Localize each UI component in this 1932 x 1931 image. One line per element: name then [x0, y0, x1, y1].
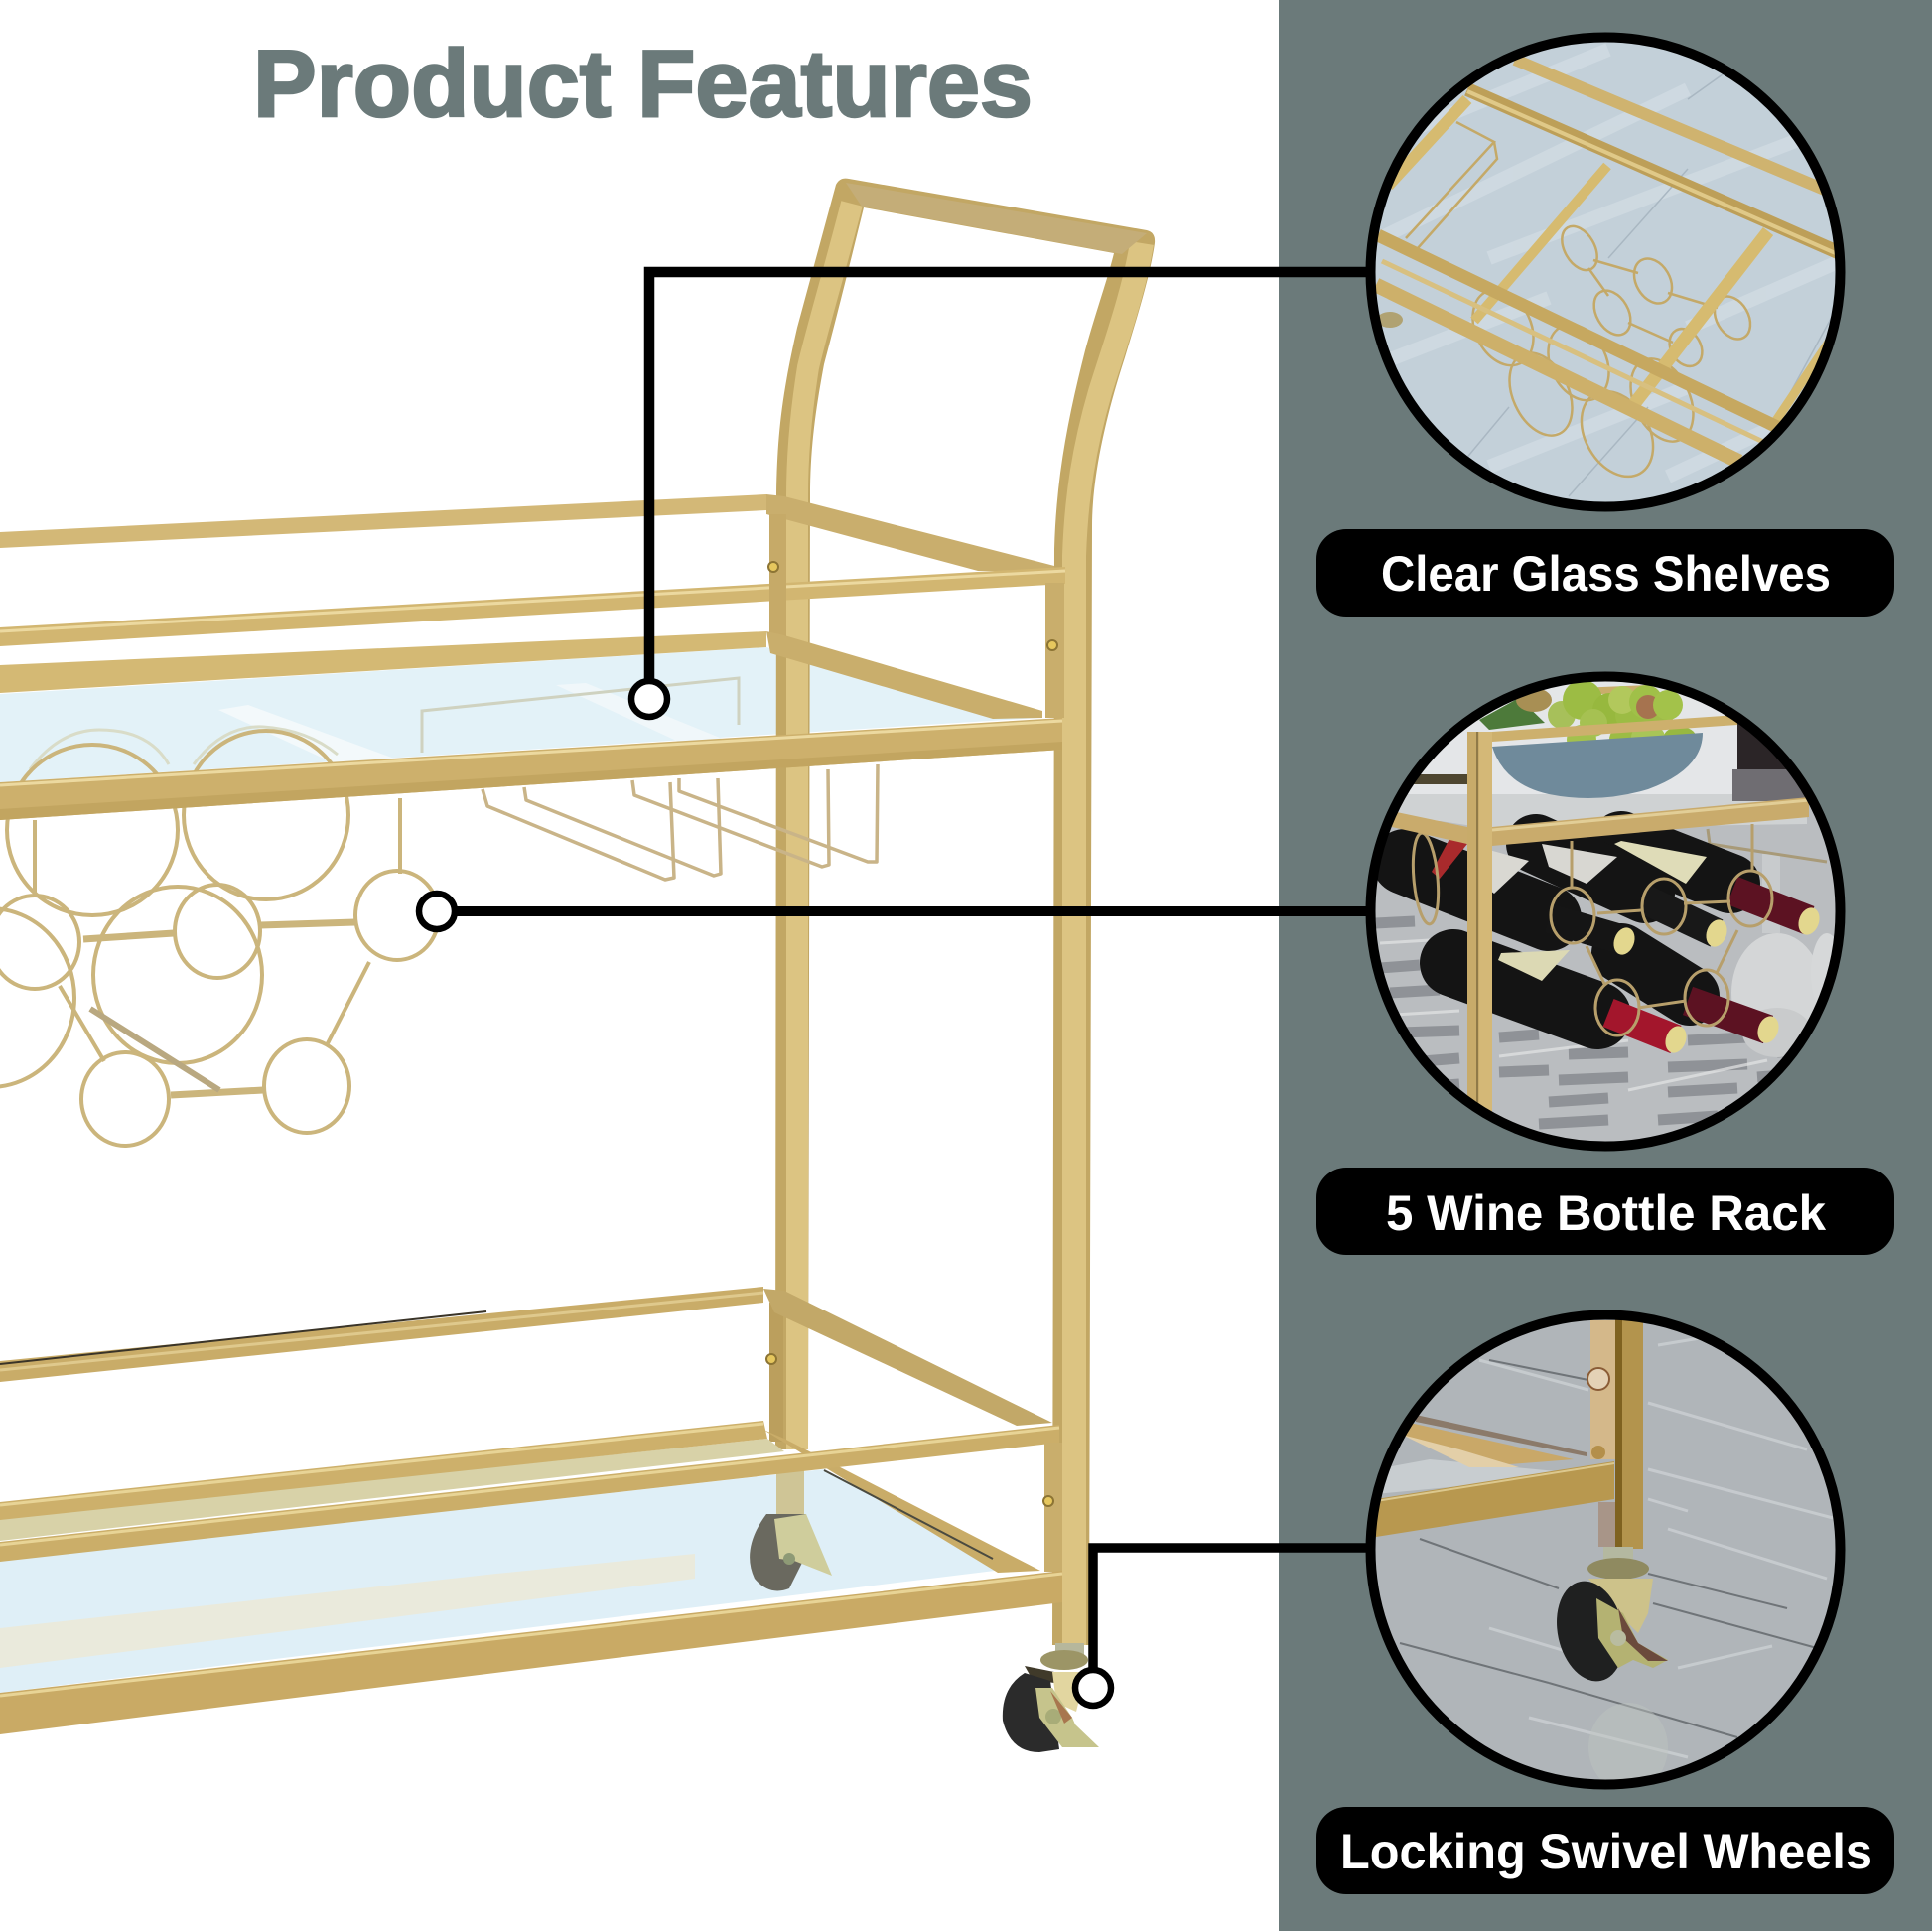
lower right bracket with bolt — [1043, 1443, 1062, 1572]
fruit bowl — [1492, 733, 1703, 798]
upper front rail — [0, 567, 1065, 646]
carpet — [1376, 806, 1835, 1142]
upper shelf back rail — [0, 494, 766, 548]
floor reflection — [1618, 1704, 1656, 1716]
leader line: swivel wheels — [1075, 1548, 1375, 1706]
rear bracket with bolts — [766, 514, 786, 1442]
label pill: clear glass shelves: Clear Glass Shelves — [1381, 546, 1831, 602]
gold top bar — [1492, 715, 1737, 742]
right bracket with bolt — [1045, 583, 1064, 718]
panel: features background — [1279, 0, 1932, 1931]
lower side rails — [763, 1289, 1052, 1573]
upper shelf glass and background — [1408, 681, 1809, 821]
gold post — [1467, 732, 1479, 1114]
wine glasses — [1731, 854, 1843, 1057]
glass hanger wire — [1708, 829, 1827, 862]
wine rack rings — [0, 731, 439, 1146]
caster wheel — [1003, 1643, 1099, 1752]
brake plate — [1596, 1598, 1668, 1668]
photo circle: locking swivel wheel close-up — [1360, 1306, 1851, 1797]
bottle labels — [1432, 839, 1707, 981]
shelf back rails — [1375, 1415, 1588, 1494]
label pill: locking swivel wheels — [1316, 1807, 1894, 1894]
label pill: clear glass shelves — [1316, 529, 1894, 617]
shelf back frame — [0, 631, 766, 693]
lower shelf front rail — [0, 1425, 1059, 1562]
wire rings — [1471, 224, 1751, 479]
front bar — [1376, 1461, 1614, 1537]
lower shelf back rail — [0, 1287, 763, 1382]
rack wires — [1410, 824, 1772, 1035]
upper side rail — [766, 494, 1054, 571]
leaves and grapes — [1479, 682, 1695, 742]
lower shelf rear rail — [0, 1421, 767, 1520]
grey floor — [1376, 1320, 1835, 1779]
caster stud and swivel — [1603, 1547, 1633, 1559]
upper shelf glass — [0, 647, 1038, 782]
label pill: locking swivel wheels: Locking Swivel Wheels — [1340, 1824, 1872, 1879]
photo circle: wine bottle rack close-up — [1360, 665, 1851, 1162]
glass shelf cross bars — [1388, 99, 1832, 422]
gold frame rails — [1376, 60, 1847, 462]
wire glass hanger — [1406, 122, 1497, 248]
stemware hanger rack — [483, 764, 878, 880]
caster peek — [1377, 312, 1403, 328]
wine bottles — [1405, 841, 1809, 1039]
handle and cart uprights — [775, 179, 1155, 1645]
lower shelf glass — [0, 1439, 1003, 1693]
label pill: wine bottle rack — [1316, 1168, 1894, 1255]
leader line: clear glass shelves — [631, 272, 1375, 717]
bar cart product illustration — [0, 179, 1155, 1752]
upper shelf front bar — [0, 718, 1062, 820]
bottle caps — [1610, 904, 1823, 1056]
title: Product Features — [253, 31, 1033, 137]
shelf bars — [1392, 811, 1467, 844]
label pill: wine bottle rack: 5 Wine Bottle Rack — [1386, 1185, 1826, 1241]
photo circle: glass shelves close-up — [1360, 30, 1851, 516]
rear wheel seen through glass — [750, 1469, 832, 1590]
tire — [1557, 1581, 1618, 1682]
lower shelf front bar — [0, 1571, 1062, 1734]
bracket — [1590, 1320, 1615, 1459]
leader line: wine bottle rack — [419, 894, 1375, 929]
post — [1615, 1320, 1622, 1547]
shelf side rail — [766, 631, 1042, 719]
